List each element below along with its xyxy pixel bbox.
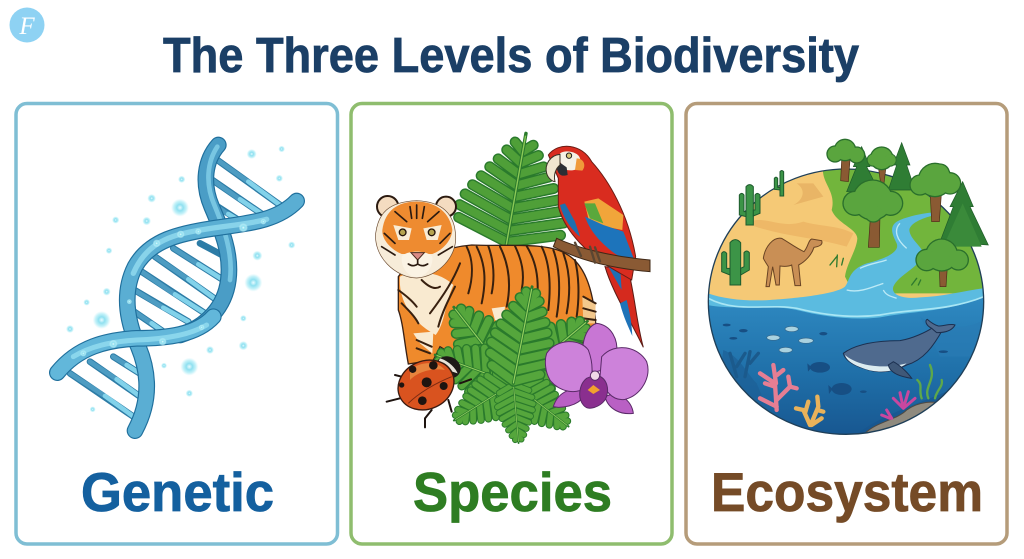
icon: camel: [763, 238, 822, 287]
DNA strand A lower: [57, 317, 213, 373]
icon: pink coral: [760, 365, 797, 410]
icon: purple orchid: [545, 323, 648, 414]
glowing particles: [66, 146, 295, 412]
tiger ears: [377, 196, 398, 217]
species illustration: [376, 124, 650, 445]
label: Ecosystem: Ecosystem: [711, 461, 983, 523]
tiger head: [376, 201, 456, 278]
icon: fish: [723, 324, 948, 395]
icon: ecosystem globe: [700, 139, 993, 440]
DNA rungs: [70, 158, 280, 420]
icon: cacti: [722, 170, 784, 285]
DNA strand A upper: [180, 145, 231, 335]
panel: ecosystem: [686, 104, 1007, 544]
globe base and water: [709, 170, 983, 434]
icon: tiger: [376, 196, 596, 364]
panel: species: [351, 104, 672, 544]
trees: [826, 139, 988, 287]
icon: ladybug: [387, 351, 471, 427]
panel: genetic: [16, 104, 338, 544]
icon: upper fern: [454, 124, 578, 256]
icon: grass tufts: [830, 255, 921, 285]
icon: whale: [843, 319, 955, 378]
icon: seaweed and anemone: [882, 365, 942, 418]
rock: [866, 402, 936, 432]
tiger stripes: [398, 246, 596, 353]
icon: brand logo: [10, 8, 44, 42]
tree canopies: [826, 139, 969, 272]
icon: dark coral: [730, 352, 758, 377]
icon: lower fern plant: [426, 281, 606, 445]
title: The Three Levels of Biodiversity: [163, 29, 859, 83]
globe outline: [708, 169, 984, 434]
DNA strand B: [127, 201, 297, 431]
icon: macaw parrot: [546, 146, 643, 347]
label: Genetic: Genetic: [81, 461, 274, 523]
label: Species: Species: [413, 461, 612, 523]
icon: branch: [553, 238, 650, 272]
icon: yellow coral: [796, 397, 823, 425]
icon: brand logo: F: [18, 13, 35, 40]
icon: DNA double helix: [57, 145, 297, 431]
